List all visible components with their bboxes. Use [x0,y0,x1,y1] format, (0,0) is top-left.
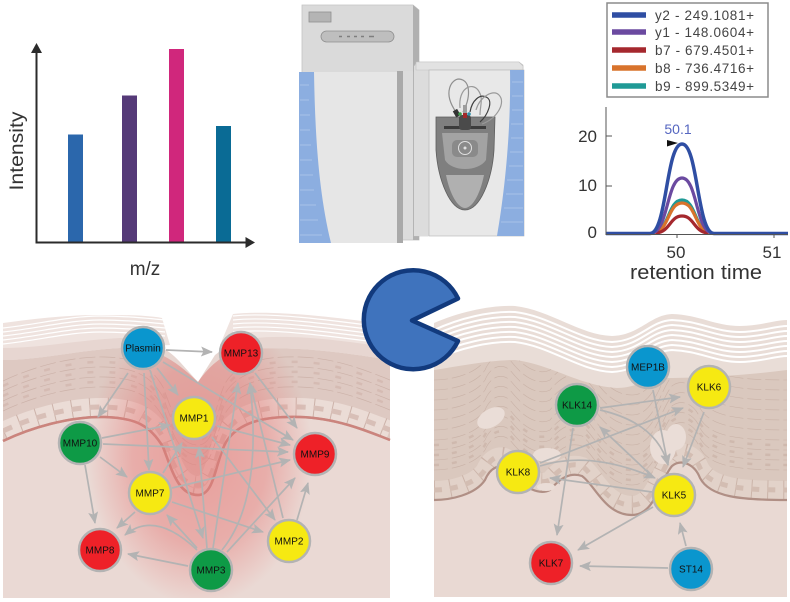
y axis label: Intensity [7,111,28,190]
node: KLK6: KLK6 [697,382,722,394]
tubing loops [449,79,502,124]
node: ST14 [670,548,712,590]
x axis title: retention time [630,262,762,284]
icon: mass spectrometer instrument [299,5,524,243]
node: MMP7 [129,472,171,514]
apex marker [667,140,678,146]
node: KLK6 [688,366,730,408]
legend: b7 - 679.4501+ [655,43,754,58]
node: MMP13: MMP13 [224,348,259,360]
node: MMP1: MMP1 [180,414,209,424]
node: KLK5: KLK5 [662,490,687,502]
legend: y2 - 249.1081+ [655,8,754,23]
node: ST14: ST14 [679,564,703,576]
node: KLK14 [556,384,598,426]
node: KLK5 [653,474,695,516]
legend [607,3,768,97]
tick labels: 20 [578,127,597,146]
interaction arrows [540,390,704,568]
icon: blue pac-man protease [364,270,458,369]
node: MMP8: MMP8 [86,546,115,556]
node: MMP2: MMP2 [275,536,304,548]
chromatogram axes [606,107,788,238]
tick labels: 51 [763,243,781,262]
node: MMP3: MMP3 [197,566,226,576]
colored connectors [453,105,471,118]
skin illustration [434,306,787,597]
chromatogram peaks [606,144,788,234]
node: MMP8 [79,529,121,571]
legend: b9 - 899.5349+ [655,79,754,94]
tick labels [578,127,781,262]
tick labels: 0 [588,223,597,242]
node: MMP10 [59,422,101,464]
node: MMP13 [220,332,262,374]
ion source housing [436,115,495,210]
bar 4 [216,126,231,242]
apex retention time label: 50.1 [664,121,692,137]
node: Plasmin: Plasmin [125,344,161,354]
mass spectrum bar chart [7,43,255,280]
legend: b8 - 736.4716+ [655,61,754,76]
node: MMP2 [268,520,310,562]
node: MEP1B [627,346,669,388]
legend: y1 - 148.0604+ [655,25,754,40]
node: KLK7: KLK7 [539,558,564,570]
node: MMP3 [190,549,232,591]
bar 2 [122,96,137,242]
node: MMP9 [294,433,336,475]
skin illustration [3,313,390,598]
node: KLK8: KLK8 [506,468,531,478]
node: KLK8 [497,451,539,493]
node: MMP7: MMP7 [136,488,165,500]
bar 3 [169,49,184,242]
right unit [414,62,524,236]
node: KLK14: KLK14 [562,400,592,412]
bar 1 [68,134,83,242]
node: Plasmin [122,327,164,369]
node: MMP9: MMP9 [301,450,330,460]
tick labels: 10 [578,176,597,195]
node: MMP10: MMP10 [63,438,98,450]
node: MEP1B: MEP1B [631,362,665,374]
chart axes with arrows [31,43,255,248]
left tower [299,5,419,243]
node: KLK7 [530,542,572,584]
node: MMP1 [173,397,215,439]
panel: KLK network on normal skin [434,306,787,597]
extracted ion chromatogram [578,3,788,284]
tick labels: 50 [667,243,685,262]
x axis label: m/z [130,259,160,280]
interaction arrows [85,350,308,566]
panel: MMP network on inflamed skin [3,313,390,598]
